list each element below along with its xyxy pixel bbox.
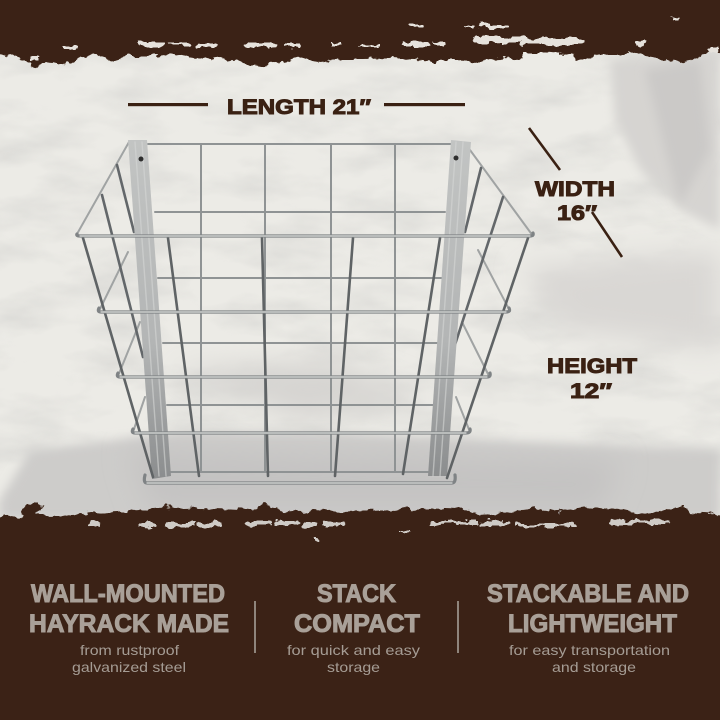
length dimension: LENGTH 21″ [227,96,371,119]
back wire grid [148,144,452,472]
top torn brown band [0,0,720,68]
light scratches in top band [30,17,718,60]
post edge highlights [135,142,463,476]
length dimension [128,96,465,119]
feature: stackable and lightweight: LIGHTWEIGHT [508,610,677,638]
left mounting post [128,140,171,479]
rail highlights [80,236,530,483]
feature: wall-mounted: HAYRACK MADE [29,610,229,638]
feature: stack compact: storage [327,659,380,675]
feature: stackable and lightweight: for easy transportation [509,642,670,658]
side wires [77,142,533,432]
post screw holes [138,156,458,162]
height dimension [547,355,637,403]
front horizontal rails [77,233,533,483]
bottom torn brown band [0,504,720,720]
feature: stackable and lightweight: and storage [552,659,636,675]
feature: wall-mounted [29,580,229,675]
feature: stack compact [287,580,420,675]
front slanted wires [83,238,528,478]
height dimension: HEIGHT [547,355,637,378]
width dimension: WIDTH [535,178,615,201]
feature: stack compact: for quick and easy [287,642,420,658]
right mounting post [428,140,471,476]
light scratches in bottom band [89,520,670,541]
textured plaster background [0,40,720,530]
feature: stackable and lightweight [487,580,689,675]
divider 2 [457,601,459,653]
hay rack illustration [77,140,533,483]
height dimension: 12″ [570,380,612,403]
feature: stack compact: STACK [317,580,396,608]
feature: wall-mounted: from rustproof [80,642,179,658]
divider 1 [254,601,256,653]
feature: wall-mounted: WALL-MOUNTED [31,580,225,608]
feature: stack compact: COMPACT [294,610,420,638]
width dimension: 16″ [557,202,597,225]
feature: wall-mounted: galvanized steel [72,659,186,675]
feature: stackable and lightweight: STACKABLE AND [487,580,689,608]
width dimension [529,128,622,257]
